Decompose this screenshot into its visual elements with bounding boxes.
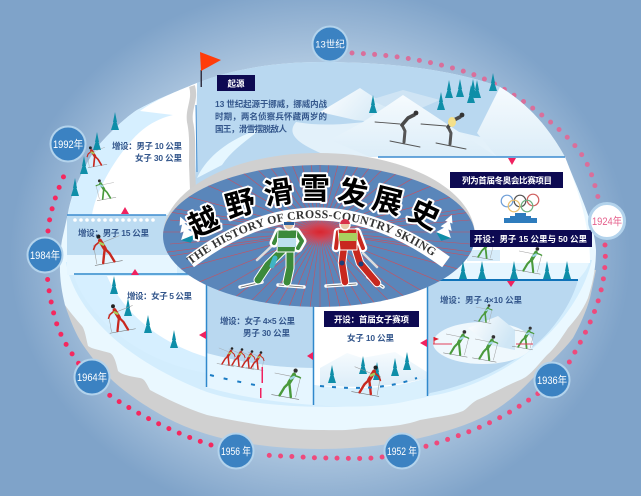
panel: 1984 xyxy=(67,215,177,275)
heading box: origin xyxy=(217,75,255,91)
title: 雪 xyxy=(300,173,330,206)
panel: 1992 hillside xyxy=(68,83,197,215)
timeline node: 1956年: 1956 年 xyxy=(221,444,251,458)
ice disc: gray rock base xyxy=(60,270,596,449)
title: 史 xyxy=(403,194,445,237)
timeline node: 1956年 xyxy=(218,434,254,468)
triangle markers xyxy=(121,158,516,360)
title: 滑 xyxy=(262,175,296,212)
icon: oval right tree xyxy=(434,212,459,244)
ice disc: pale inner band xyxy=(66,260,592,407)
skiers: small events xyxy=(87,146,542,399)
panel: 1964 xyxy=(74,274,206,373)
timeline dots xyxy=(47,53,605,458)
panel: origin sky dome xyxy=(195,62,565,190)
skiers: origin scouts xyxy=(375,111,466,149)
panel: 1936 xyxy=(427,280,578,396)
timeline node: 1952年 xyxy=(384,434,420,468)
text: 1936 event: 增设：男子 4×10 公里 xyxy=(440,295,522,305)
heading box: 1924 events xyxy=(470,230,592,247)
heading box: 1952 xyxy=(324,311,419,327)
panel: 1924 xyxy=(314,157,590,280)
text: 1964 event: 增设：女子 5 公里 xyxy=(127,291,192,301)
timeline node: 1924年: 1924年 xyxy=(592,214,622,228)
text: 1992 events: 女子 30 公里 xyxy=(135,153,182,163)
panel: 1952 xyxy=(314,276,427,407)
text: 1956 events: 增设：女子 4×5 公里 xyxy=(220,316,295,326)
text: 1956 events xyxy=(220,316,295,338)
text: origin xyxy=(215,99,327,134)
mountains xyxy=(320,88,405,125)
heading box: 1924 listed xyxy=(450,172,563,188)
title xyxy=(183,173,445,245)
sunburst rays xyxy=(163,165,472,307)
course markers xyxy=(210,337,533,398)
title: 野 xyxy=(222,185,259,225)
subtitle band: THE HISTORY OF CROSS-COUNTRY SKIING xyxy=(186,210,436,264)
timeline node: 1952年: 1952 年 xyxy=(387,444,417,458)
heading box: 1924 events: 开设：男子 15 公里与 50 公里 xyxy=(474,234,587,244)
icon: flag xyxy=(200,52,221,87)
heading box: 1924 listed: 列为首届冬奥会比赛项目 xyxy=(462,176,552,186)
title: 展 xyxy=(369,182,406,221)
trees xyxy=(71,73,571,383)
text: origin: 13 世纪起源于挪威，挪威内战 xyxy=(215,99,327,109)
timeline node: 13世纪: 13世纪 xyxy=(315,38,345,50)
heading box: 1952: 开设：首届女子赛项 xyxy=(334,314,409,324)
central oval xyxy=(163,153,474,307)
timeline node: 1936年 xyxy=(534,362,570,398)
text: 1952 event: 女子 10 公里 xyxy=(347,333,394,343)
icon: olympic rings and podium xyxy=(501,194,539,223)
timeline node: 1936年: 1936年 xyxy=(537,373,567,387)
timeline node: 1992年: 1992年 xyxy=(53,137,83,151)
icon: oval left tree xyxy=(173,214,198,246)
big red skier xyxy=(326,219,383,287)
text: 1956 events: 男子 30 公里 xyxy=(243,328,290,338)
text: 1992 events: 增设：男子 10 公里 xyxy=(112,141,182,151)
panel: 1956 xyxy=(206,276,314,405)
timeline node: 1984年 xyxy=(28,238,62,272)
text: 1992 events xyxy=(112,141,182,163)
timeline node: 1992年 xyxy=(50,126,86,162)
big green skier xyxy=(240,220,304,287)
snow base xyxy=(292,118,565,157)
text: 1984 event: 增设：男子 15 公里 xyxy=(78,228,149,238)
text: origin: 国王，滑雪摆脱敌人 xyxy=(215,124,287,134)
timeline node: 1964年 xyxy=(74,360,110,394)
timeline node: 13世纪 xyxy=(312,26,348,62)
timeline node: 1924年 xyxy=(590,204,624,238)
title: 越 xyxy=(183,202,225,245)
timeline node: 1984年: 1984年 xyxy=(30,248,60,262)
title: 发 xyxy=(335,175,370,212)
heading box: origin: 起源 xyxy=(227,78,245,88)
text: origin: 时期，两名侦察兵怀藏两岁的 xyxy=(215,112,327,122)
ice disc: snow surface xyxy=(60,62,596,430)
timeline node: 1964年: 1964年 xyxy=(77,370,107,384)
